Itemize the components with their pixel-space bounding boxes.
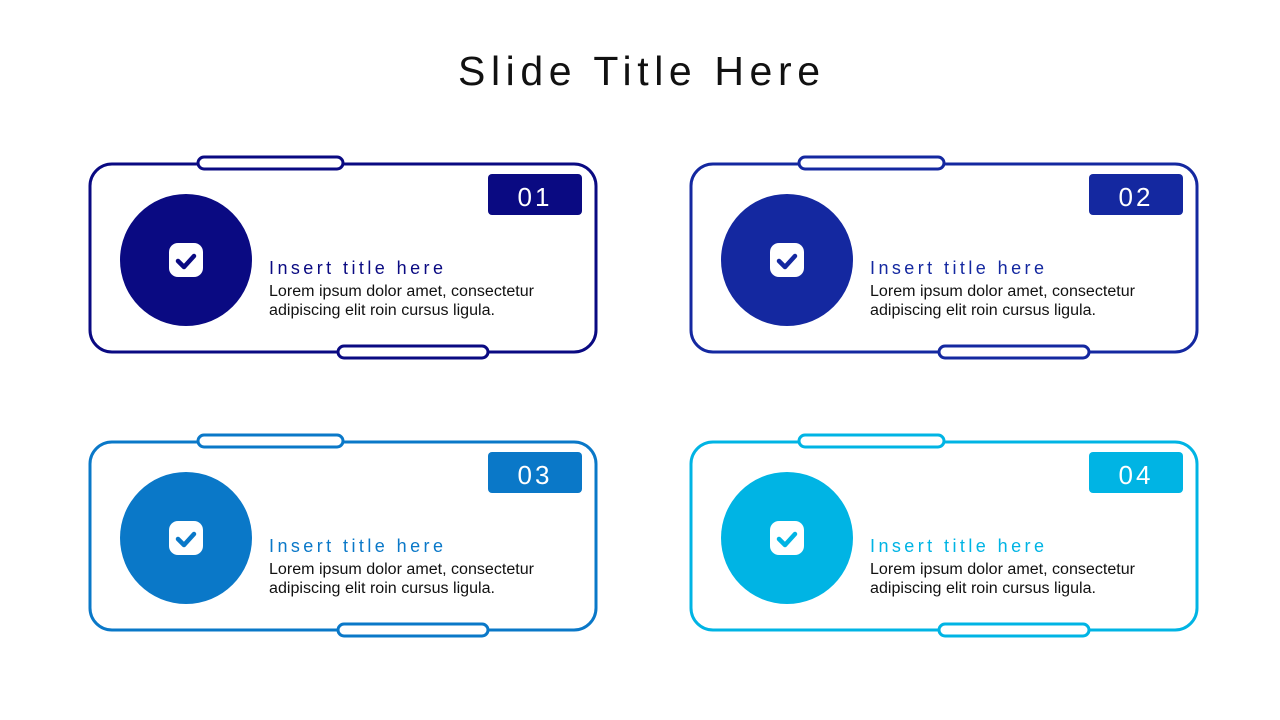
- text block: Lorem ipsum dolor amet, consectetur: [870, 561, 1135, 578]
- text block: adipiscing elit roin cursus ligula.: [870, 580, 1096, 597]
- text block: Lorem ipsum dolor amet, consectetur: [269, 561, 534, 578]
- top tab: [799, 435, 944, 447]
- text block: adipiscing elit roin cursus ligula.: [870, 302, 1096, 319]
- text block: [870, 536, 1135, 597]
- number badge: [488, 174, 582, 215]
- icon circle: [120, 472, 252, 604]
- text block: Insert title here: [269, 536, 443, 556]
- card 02: [691, 157, 1197, 358]
- card 04: [691, 435, 1197, 636]
- text block: Insert title here: [269, 258, 443, 278]
- text block: adipiscing elit roin cursus ligula.: [269, 302, 495, 319]
- bottom tab: [939, 624, 1089, 636]
- bottom tab: [338, 346, 488, 358]
- number badge: [1089, 452, 1183, 493]
- card 01: [90, 157, 596, 358]
- text block: Insert title here: [870, 536, 1044, 556]
- bottom tab: [939, 346, 1089, 358]
- text block: adipiscing elit roin cursus ligula.: [269, 580, 495, 597]
- top tab: [799, 157, 944, 169]
- bottom tab: [338, 624, 488, 636]
- text block: Insert title here: [870, 258, 1044, 278]
- top tab: [198, 435, 343, 447]
- icon circle: [120, 194, 252, 326]
- text block: Lorem ipsum dolor amet, consectetur: [269, 283, 534, 300]
- title: Slide Title Here: [458, 48, 820, 94]
- number badge: [488, 452, 582, 493]
- number badge: 01: [518, 182, 552, 212]
- top tab: [198, 157, 343, 169]
- text block: [269, 536, 534, 597]
- number badge: 03: [518, 460, 552, 490]
- icon circle: [721, 472, 853, 604]
- card 03: [90, 435, 596, 636]
- text block: [269, 258, 534, 319]
- text block: Lorem ipsum dolor amet, consectetur: [870, 283, 1135, 300]
- number badge: 02: [1119, 182, 1153, 212]
- number badge: [1089, 174, 1183, 215]
- number badge: 04: [1119, 460, 1153, 490]
- icon circle: [721, 194, 853, 326]
- text block: [870, 258, 1135, 319]
